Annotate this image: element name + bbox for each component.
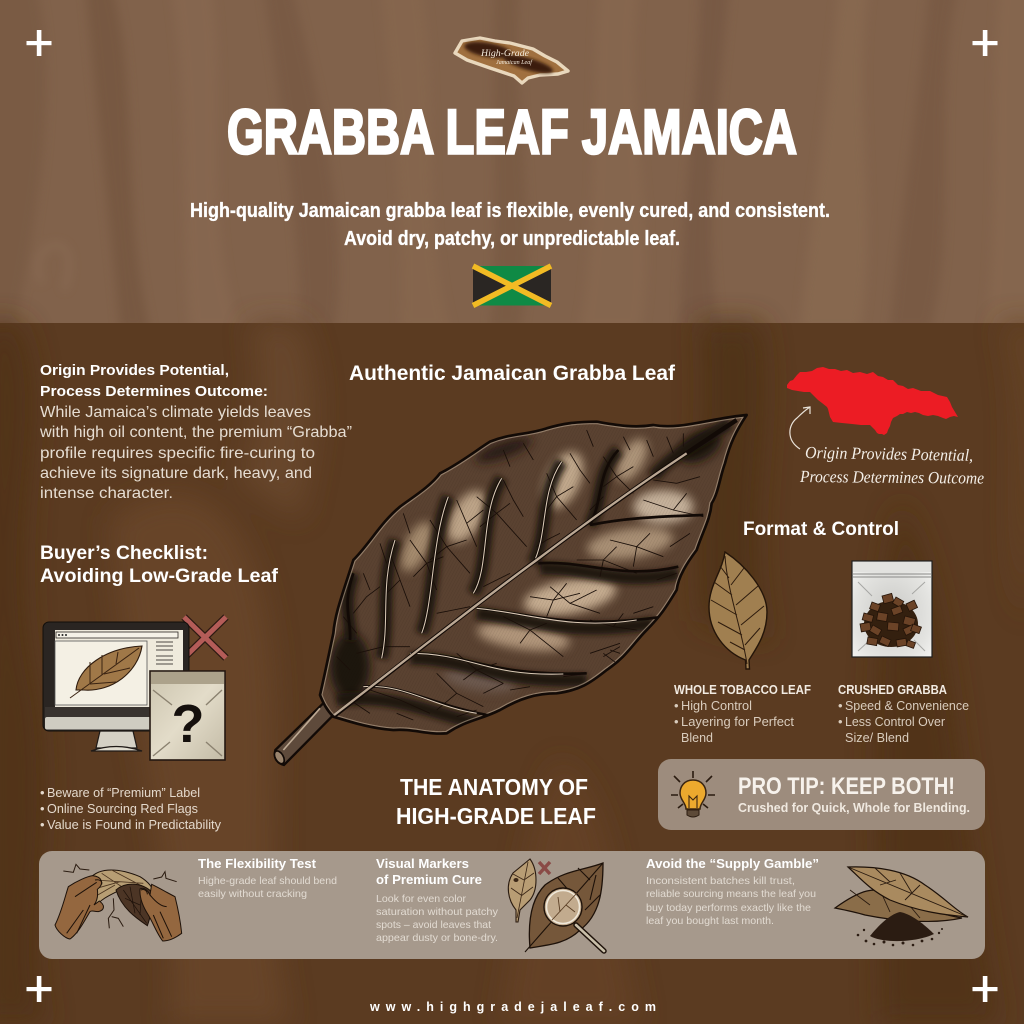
text block: origin: with high oil content, the premium “Grabba” <box>39 424 352 441</box>
leaf outline <box>320 415 747 734</box>
text block: origin: intense character. <box>40 485 173 502</box>
text: pro tip: PRO TIP: KEEP BOTH! <box>738 773 955 800</box>
arrow: map pointer <box>790 407 810 449</box>
icon: plus bottom left <box>26 976 52 1002</box>
icon: whole tobacco leaf <box>709 552 767 669</box>
text: supply gamble: reliable sourcing means the leaf you <box>646 888 816 900</box>
heading: Buyer's Checklist: Buyer’s Checklist: <box>40 542 208 564</box>
logo: Jamaica silhouette badge: High-Grade <box>480 49 529 59</box>
background: upper band <box>0 0 1024 330</box>
text: whole tobacco leaf: WHOLE TOBACCO LEAF <box>674 683 811 697</box>
leaf dark shading along veins <box>337 423 730 727</box>
text: supply gamble: Inconsistent batches kill trust, <box>646 875 795 887</box>
text: flexibility test: easily without cracking <box>198 888 307 900</box>
leaf blade <box>320 415 747 734</box>
text: visual markers: saturation without patchy <box>376 906 499 918</box>
text: whole tobacco leaf: Layering for Perfect <box>681 714 794 729</box>
handwritten caption: origin <box>799 443 985 488</box>
icon: magnifier on leaves <box>508 859 604 952</box>
bullet list: checklist: • <box>40 817 45 832</box>
text: visual markers: Look for even color <box>376 893 466 905</box>
text: flexibility test <box>198 856 337 900</box>
text: crushed grabba: • <box>838 714 843 729</box>
text block: origin: Origin Provides Potential, <box>40 362 229 379</box>
icon: plus bottom right <box>972 976 998 1002</box>
bullet list: checklist: Value is Found in Predictability <box>47 817 221 832</box>
text: pro tip detail: Crushed for Quick, Whole for Blending. <box>738 800 970 815</box>
heading: Authentic Jamaican Grabba Leaf: Authentic Jamaican Grabba Leaf <box>349 362 676 385</box>
icon: monitor <box>43 622 189 751</box>
icon: plus top right <box>972 30 998 56</box>
heading: anatomy of high-grade leaf: HIGH-GRADE LEAF <box>396 803 596 829</box>
leaf tertiary veins <box>337 430 703 720</box>
subtitle: High-quality Jamaican grabba leaf is flexible, evenly cured, and consistent. <box>190 200 830 222</box>
heading: anatomy of high-grade leaf: THE ANATOMY OF <box>400 774 588 800</box>
icon: mystery bag: ? <box>172 694 204 754</box>
text block: origin: Process Determines Outcome: <box>40 383 268 400</box>
bullet list: checklist: Online Sourcing Red Flags <box>47 801 198 816</box>
text: whole tobacco leaf: High Control <box>681 698 752 713</box>
text: visual markers: of Premium Cure <box>376 872 482 887</box>
text: supply gamble: buy today performs exactly like the <box>646 902 811 914</box>
heading: Buyer's Checklist: Avoiding Low-Grade Leaf <box>40 565 278 587</box>
text: crushed grabba <box>838 683 969 745</box>
handwritten caption: origin: Origin Provides Potential, <box>805 443 973 465</box>
bullet list: checklist: • <box>40 785 45 800</box>
text: whole tobacco leaf <box>674 683 811 745</box>
subtitle <box>190 200 830 250</box>
leaf edge highlight <box>320 415 747 734</box>
text: crushed grabba: Size/ Blend <box>845 730 909 745</box>
text block: origin: While Jamaica’s climate yields leaves <box>40 404 311 421</box>
text block: origin <box>39 362 352 502</box>
text: whole tobacco leaf: • <box>674 714 679 729</box>
panel: pro tip <box>658 759 985 830</box>
icon: Jamaica red map <box>787 367 958 435</box>
logo: Jamaica silhouette badge: Jamaican Leaf <box>496 59 533 66</box>
bullet list: checklist: • <box>40 801 45 816</box>
background: lower band <box>0 323 1024 1024</box>
leaf shading <box>321 416 744 732</box>
footer: website: www.highgradejaleaf.com <box>369 1000 656 1014</box>
text: flexibility test: Highe-grade leaf should bend <box>198 875 337 887</box>
leaf side veins light <box>363 462 637 713</box>
text: supply gamble: leaf you bought last month. <box>646 915 774 927</box>
text: crushed grabba: Less Control Over <box>845 714 946 729</box>
heading: Format & Control: Format & Control <box>743 519 899 540</box>
icon: mystery bag <box>150 671 225 760</box>
text: flexibility test: The Flexibility Test <box>198 856 317 871</box>
subtitle: Avoid dry, patchy, or unpredictable leaf. <box>344 228 680 250</box>
illustration: main grabba leaf <box>270 400 760 770</box>
heading: Buyer's Checklist <box>40 542 278 587</box>
panel: anatomy markers <box>39 851 985 959</box>
handwritten caption: origin: Process Determines Outcome <box>799 467 985 488</box>
bullet list: checklist: Beware of “Premium” Label <box>47 785 200 800</box>
icon: light bulb <box>671 771 715 817</box>
text: whole tobacco leaf: Blend <box>681 730 713 745</box>
text: visual markers: spots – avoid leaves that <box>376 919 491 931</box>
leaf midrib <box>333 418 738 716</box>
heading: anatomy of high-grade leaf <box>396 774 596 829</box>
logo: Jamaica silhouette badge <box>455 38 568 83</box>
icon: red cross <box>184 617 226 658</box>
text: supply gamble: Avoid the “Supply Gamble” <box>646 856 819 871</box>
icon: crushed grabba bag <box>852 561 932 657</box>
text: crushed grabba: CRUSHED GRABBA <box>838 683 947 697</box>
leaf stem <box>275 698 337 765</box>
text block: origin: profile requires specific fire-curing to <box>40 445 315 462</box>
icon: Jamaican flag <box>473 266 551 306</box>
icon: leaves and crushed pile <box>835 867 968 946</box>
text: crushed grabba: Speed & Convenience <box>845 698 969 713</box>
text: supply gamble <box>646 856 819 927</box>
text block: origin: achieve its signature dark, heavy, and <box>40 465 312 482</box>
icon: monitor, cross and mystery bag <box>43 617 226 760</box>
icon: plus top left <box>26 30 52 56</box>
bullet list: checklist <box>40 785 221 832</box>
text: visual markers <box>376 856 499 944</box>
text: crushed grabba: • <box>838 698 843 713</box>
leaf side veins dark <box>348 450 703 717</box>
title: GRABBA LEAF JAMAICA <box>227 98 797 168</box>
text: whole tobacco leaf: • <box>674 698 679 713</box>
text: visual markers: appear dusty or bone-dry. <box>376 932 498 944</box>
text: visual markers: Visual Markers <box>376 856 469 871</box>
icon: hands bending leaf <box>55 864 182 941</box>
